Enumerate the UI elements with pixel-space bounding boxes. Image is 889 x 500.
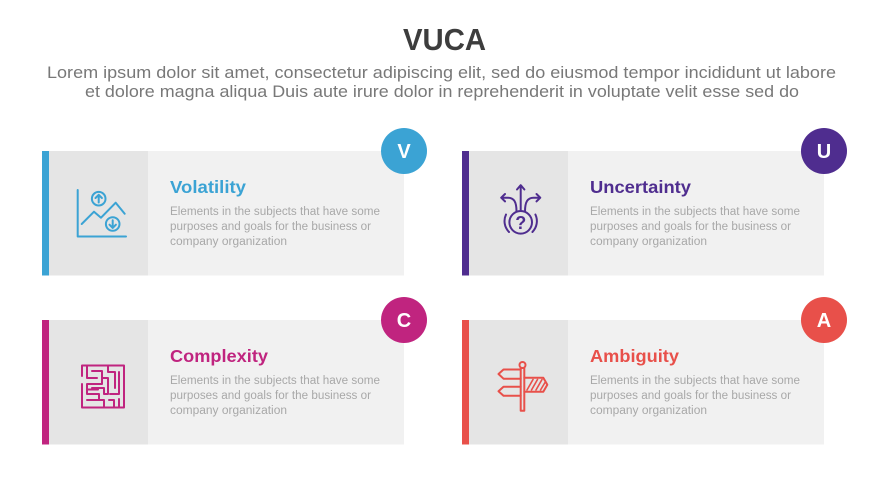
badge: U bbox=[801, 128, 847, 174]
icon: signpost bbox=[498, 362, 547, 411]
icon: question mark with diverging arrows bbox=[501, 185, 540, 234]
subtitle text: Lorem ipsum dolor sit amet, consectetur adipiscing elit, sed do eiusmod tempor incididunt ut labore bbox=[47, 64, 836, 82]
badge: V: V bbox=[397, 141, 411, 163]
description: volatility bbox=[170, 206, 380, 248]
icon: question mark with diverging arrows: ? bbox=[515, 213, 526, 233]
panel: volatility bbox=[42, 128, 427, 276]
description: complexity: purposes and goals for the business or bbox=[170, 390, 371, 402]
heading: volatility: Volatility bbox=[170, 177, 246, 197]
description: ambiguity: Elements in the subjects that have some bbox=[590, 375, 800, 387]
description: ambiguity: company organization bbox=[590, 405, 707, 417]
panel: complexity bbox=[42, 297, 427, 444]
badge: C bbox=[381, 297, 427, 343]
badge: A: A bbox=[817, 310, 831, 332]
heading: complexity: Complexity bbox=[170, 346, 268, 366]
description: volatility: Elements in the subjects that have some bbox=[170, 206, 380, 218]
badge: A bbox=[801, 297, 847, 343]
description: uncertainty: purposes and goals for the business or bbox=[590, 221, 791, 233]
description: volatility: purposes and goals for the business or bbox=[170, 221, 371, 233]
description: uncertainty: company organization bbox=[590, 236, 707, 248]
subtitle text bbox=[47, 64, 836, 101]
description: uncertainty bbox=[590, 206, 800, 248]
subtitle text: et dolore magna aliqua Duis aute irure dolor in reprehenderit in voluptate velit esse sed do bbox=[85, 83, 799, 101]
icon: line chart with up and down arrows bbox=[78, 190, 126, 236]
description: volatility: company organization bbox=[170, 236, 287, 248]
panel: ambiguity bbox=[462, 297, 847, 444]
description: complexity bbox=[170, 375, 380, 417]
heading: uncertainty: Uncertainty bbox=[590, 177, 691, 197]
description: ambiguity bbox=[590, 375, 800, 417]
badge: U: U bbox=[817, 141, 831, 163]
badge: C: C bbox=[397, 310, 411, 332]
badge: V bbox=[381, 128, 427, 174]
description: complexity: company organization bbox=[170, 405, 287, 417]
description: ambiguity: purposes and goals for the business or bbox=[590, 390, 791, 402]
description: complexity: Elements in the subjects that have some bbox=[170, 375, 380, 387]
panel: uncertainty bbox=[462, 128, 847, 276]
icon: maze bbox=[82, 366, 124, 408]
title: VUCA bbox=[403, 22, 486, 57]
heading: ambiguity: Ambiguity bbox=[590, 346, 679, 366]
description: uncertainty: Elements in the subjects that have some bbox=[590, 206, 800, 218]
